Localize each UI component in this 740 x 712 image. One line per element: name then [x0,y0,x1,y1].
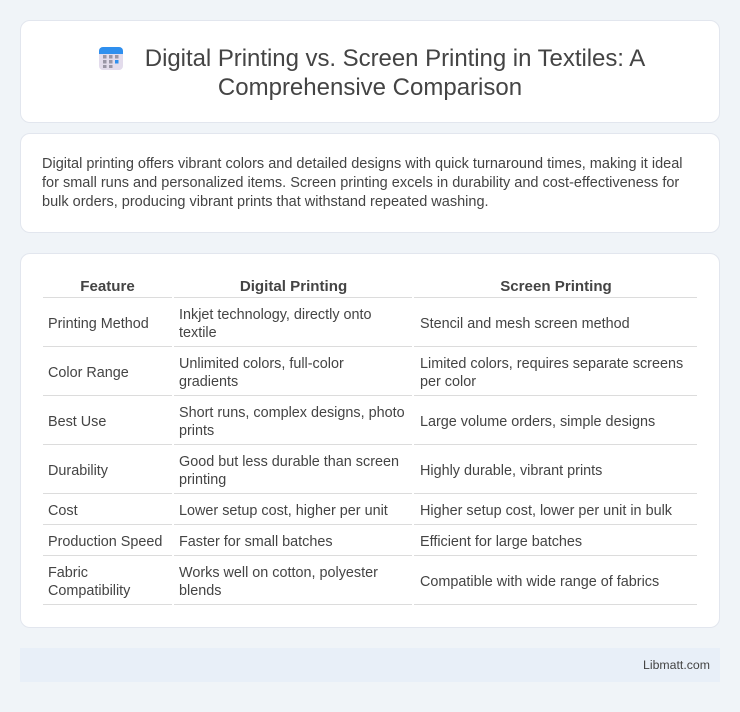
table: comparison: Large volume orders, simple designs [420,414,655,430]
panel: intro card [20,133,720,233]
title line 1: Digital Printing vs. Screen Printing in Textiles: A [145,45,645,72]
row: Production Speed: Production Speed [48,534,162,550]
intro text line 1: Digital printing offers vibrant colors and detailed designs with quick turnaround times, making it ideal [42,156,682,172]
row: Fabric Compatibility: Fabric [48,565,88,581]
table: comparison: Compatibility [48,583,130,599]
table: comparison: Stencil and mesh screen method [420,316,630,332]
row: Color Range: Color Range [48,365,129,381]
table: comparison: Lower setup cost, higher per unit [179,503,388,519]
table: comparison [43,278,697,605]
icon: calendar [99,47,123,70]
table: comparison: Unlimited colors, full-color [179,356,344,372]
row: Best Use: Best Use [48,414,106,430]
table: comparison: Works well on cotton, polyester [179,565,378,581]
intro text line 2: for small runs and personalized items. Screen printing excels in durability and cost-effectiveness for [42,175,679,191]
panel: title card [20,20,720,123]
table: comparison: prints [179,423,214,439]
header: Screen Printing: Screen Printing [500,278,612,295]
table: comparison: Limited colors, requires separate screens [420,356,683,372]
table: comparison: Inkjet technology, directly onto [179,307,372,323]
table: comparison: Efficient for large batches [420,534,582,550]
header: Feature: Feature [80,278,135,295]
row: Durability: Durability [48,463,108,479]
table: comparison: Highly durable, vibrant prints [420,463,602,479]
intro text line 3: bulk orders, producing vibrant prints that withstand repeated washing. [42,194,489,210]
table: comparison: printing [179,472,226,488]
header: Digital Printing: Digital Printing [240,278,347,295]
row: Printing Method: Printing Method [48,316,149,332]
table: comparison: Higher setup cost, lower per unit in bulk [420,503,672,519]
title line 2: Comprehensive Comparison [218,74,522,101]
table: comparison: textile [179,325,217,341]
panel: table card [20,253,720,628]
table: comparison: Compatible with wide range of fabrics [420,574,659,590]
footer text: Libmatt.com [643,658,710,672]
table: comparison: Faster for small batches [179,534,333,550]
table: comparison: Short runs, complex designs, photo [179,405,405,421]
table: comparison: blends [179,583,221,599]
row: Cost: Cost [48,503,78,519]
table: comparison: Good but less durable than screen [179,454,399,470]
table: comparison: per color [420,374,476,390]
footer bar [20,648,720,682]
table: comparison: gradients [179,374,238,390]
